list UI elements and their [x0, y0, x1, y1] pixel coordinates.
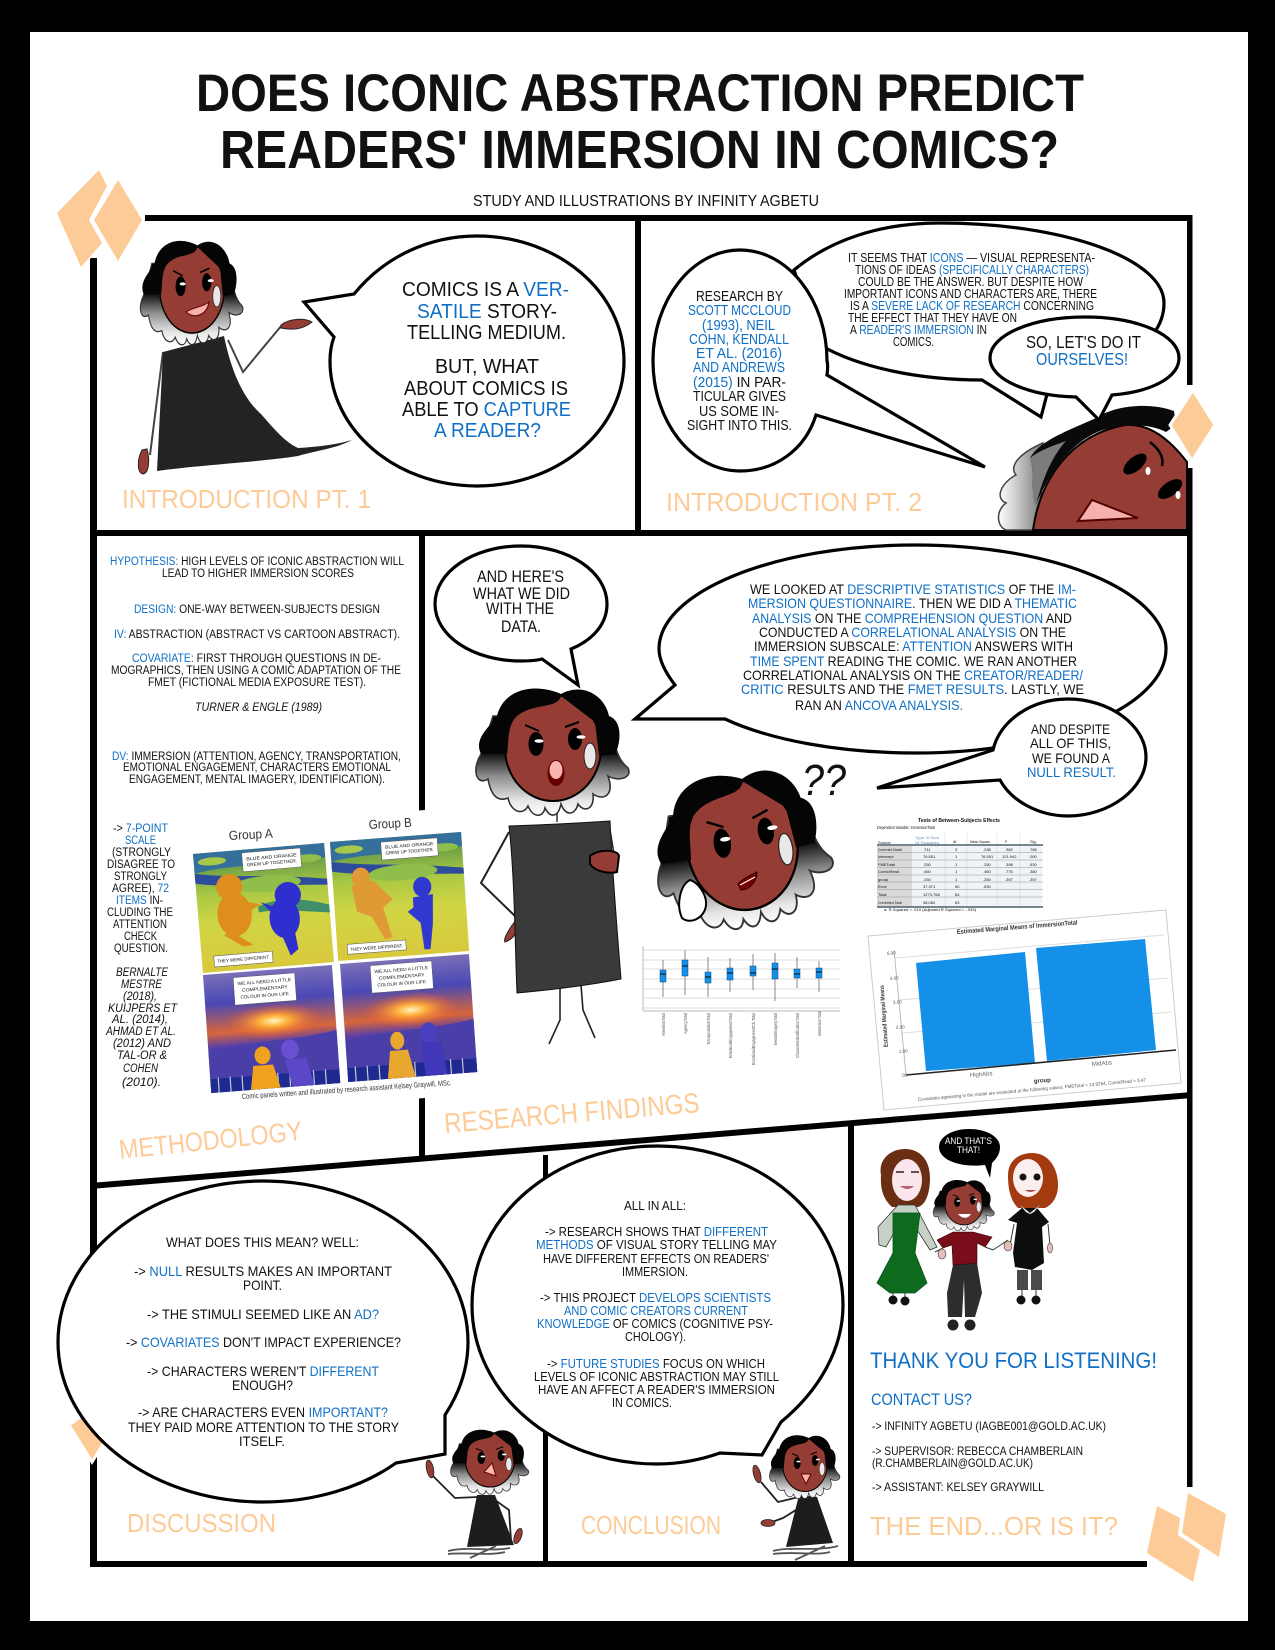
- decorative diamonds top-left: [57, 170, 142, 267]
- comic panel B top: BLUE AND ORANGE: [385, 841, 434, 850]
- panel: conclusion: [472, 1146, 843, 1560]
- speech bubble: versatile medium: BUT, WHAT: [435, 356, 539, 378]
- bar chart: estimated marginal means: 4.00: [890, 975, 899, 981]
- character: presenter pointing: [138, 241, 352, 474]
- speech bubble: versatile medium: ABOUT COMICS IS: [404, 378, 568, 400]
- ANOVA results table: .250: [983, 877, 992, 882]
- speech bubble: discussion points: -> CHARACTERS WEREN'T DIFFERENT: [147, 1363, 379, 1379]
- scale and references text: CHECK: [124, 931, 157, 943]
- speech bubble: discussion points: -> ARE CHARACTERS EVEN IMPORTANT?: [138, 1404, 388, 1420]
- ANOVA results table: df: [953, 839, 957, 844]
- bar chart: estimated marginal means: .00: [901, 1072, 908, 1078]
- black speech bubble: [939, 1129, 1000, 1178]
- speech bubble: icons explanation: COULD BE THE ANSWER. BUT DESPITE HOW: [858, 275, 1083, 289]
- panel: research findings: [435, 545, 1181, 1139]
- speech bubble: research by: [653, 250, 985, 471]
- panel label: methodology: METHODOLOGY: [117, 1116, 304, 1165]
- speech bubble: conclusions: [472, 1146, 843, 1464]
- title: [196, 64, 1084, 180]
- speech bubble: discussion points: -> THE STIMULI SEEMED LIKE AN AD?: [147, 1306, 379, 1322]
- bar chart: estimated marginal means: 5.00: [887, 950, 896, 956]
- figure caption: Comic panels written and illustrated by research assistant Kelsey Graywill, MSc.: [242, 1078, 452, 1101]
- speech bubble: analysis description: CONDUCTED A CORRELATIONAL ANALYSIS ON THE: [759, 624, 1066, 640]
- speech bubble: so let's do it ourselves: SO, LET'S DO IT: [1026, 332, 1141, 352]
- ANOVA results table: F: [1005, 839, 1008, 844]
- ANOVA results table: .460: [983, 869, 992, 874]
- speech bubble: icons explanation: A READER'S IMMERSION IN: [850, 323, 987, 337]
- ANOVA results table: Dependent Variable: ImmersionTotal: [877, 825, 935, 830]
- box plot of immersion subscales: [643, 946, 840, 1065]
- scale and references text: COHEN: [123, 1063, 159, 1075]
- speech bubble: versatile medium: SATILE STORY-: [417, 301, 557, 323]
- speech bubble: icons explanation: THE EFFECT THAT THEY HAVE ON: [848, 311, 1017, 325]
- study design text: LEAD TO HIGHER IMMERSION SCORES: [162, 568, 354, 580]
- bar chart: estimated marginal means: HighAbs: [970, 1071, 993, 1079]
- speech bubble: conclusions: ALL IN ALL:: [624, 1198, 686, 1213]
- speech bubble: conclusions: LEVELS OF ICONIC ABSTRACTION MAY STILL: [534, 1369, 779, 1384]
- scale and references text: MESTRE: [121, 979, 162, 991]
- comic panel B bottom: WE ALL NEED A LITTLE: [374, 965, 428, 974]
- bar chart: estimated marginal means: 2.00: [896, 1024, 905, 1030]
- scale and references text: AL. (2014),: [111, 1014, 168, 1026]
- speech bubble: so let's do it ourselves: OURSELVES!: [1036, 349, 1128, 369]
- speech bubble: research by: RESEARCH BY: [696, 288, 783, 305]
- icon: question marks: ??: [802, 756, 846, 805]
- speech bubble: research by: SIGHT INTO THIS.: [687, 417, 792, 434]
- speech bubble: research by: SCOTT MCCLOUD: [688, 302, 791, 319]
- ANOVA results table: 121.942: [1002, 854, 1017, 859]
- speech bubble: conclusions: METHODS OF VISUAL STORY TELLING MAY: [536, 1237, 777, 1252]
- decorative diamond lower left: [69, 1408, 115, 1462]
- ANOVA results table: .776: [1005, 869, 1014, 874]
- ANOVA results table: 1: [955, 862, 958, 867]
- speech bubble: conclusions: HAVE DIFFERENT EFFECTS ON READERS': [543, 1251, 769, 1266]
- ANOVA results table: .766: [1029, 847, 1038, 852]
- ANOVA results table: .250: [923, 877, 932, 882]
- box plot of immersion subscales: CharacterIdentificationTotal: [795, 1013, 800, 1058]
- speech bubble: and here's what we did: AND HERE'S: [477, 568, 564, 586]
- comic panel frame: [90, 215, 1192, 1567]
- speech bubble: null result: [877, 699, 1146, 816]
- speech bubble: conclusions: -> RESEARCH SHOWS THAT DIFFERENT: [545, 1224, 768, 1239]
- scale and references text: KUIJPERS ET: [108, 1003, 178, 1015]
- panel: introduction part 2: [653, 223, 1187, 530]
- ANOVA results table: Corrected Total: [878, 900, 902, 905]
- panel label: discussion: DISCUSSION: [127, 1508, 276, 1538]
- speech bubble: research by: AND ANDREWS: [693, 359, 785, 376]
- contact list: -> INFINITY AGBETU (IAGBE001@GOLD.AC.UK): [872, 1419, 1106, 1433]
- speech bubble: discussion points: ENOUGH?: [232, 1377, 293, 1393]
- study design text: FMET (FICTIONAL MEDIA EXPOSURE TEST).: [148, 677, 366, 689]
- speech bubble: conclusions: CHOLOGY).: [625, 1329, 686, 1344]
- ANOVA results table: .530: [1029, 862, 1038, 867]
- speech bubble: icons explanation: COMICS.: [893, 335, 934, 349]
- speech bubble: versatile medium: ABLE TO CAPTURE: [402, 399, 571, 421]
- illustration: three researchers: [877, 1129, 1058, 1330]
- ANOVA results table: .250: [983, 862, 992, 867]
- speech bubble: conclusions: HAVE AN AFFECT A READER'S IMMERSION: [538, 1382, 775, 1397]
- ANOVA results table: of Squares: [915, 840, 939, 845]
- panel: introduction part 1: [122, 236, 624, 514]
- speech bubble: conclusions: -> THIS PROJECT DEVELOPS SCIENTISTS: [540, 1290, 771, 1305]
- ANOVA results table: Total: [878, 892, 887, 897]
- speech bubble: null result: AND DESPITE: [1031, 721, 1110, 737]
- speech bubble: discussion points: WHAT DOES THIS MEAN? WELL:: [166, 1234, 359, 1250]
- speech bubble: null result: WE FOUND A: [1032, 750, 1111, 766]
- panel: the end: [870, 1129, 1157, 1541]
- comic panel A bottom: WE ALL NEED A LITTLE: [237, 977, 291, 986]
- scale and references text: QUESTION.: [114, 943, 168, 955]
- left researcher in green dress: [877, 1149, 937, 1306]
- study design text: [110, 556, 405, 786]
- bar chart: estimated marginal means: Estimated Marginal Means: [880, 984, 890, 1047]
- character: discussion presenter: [425, 1430, 529, 1558]
- speech bubble: icons explanation: IMPORTANT ICONS AND CHARACTERS ARE, THERE: [844, 287, 1097, 301]
- ANOVA results table: 1: [955, 854, 958, 859]
- ANOVA results table: ComicRead: [878, 869, 899, 874]
- speech bubble: analysis description: TIME SPENT READING THE COMIC. WE RAN ANOTHER: [750, 653, 1077, 669]
- title: DOES ICONIC ABSTRACTION PREDICT: [196, 64, 1084, 123]
- scale and references text: STRONGLY: [114, 871, 167, 883]
- contact list: [872, 1419, 1106, 1494]
- speech bubble: discussion points: POINT.: [243, 1277, 282, 1293]
- scale and references text: AHMAD ET AL.: [105, 1026, 176, 1038]
- speech bubble: icons explanation: IS A SEVERE LACK OF RESEARCH CONCERNING: [850, 299, 1094, 313]
- character: confused face: [644, 761, 840, 939]
- ANOVA results table: Corrected Model: [878, 847, 902, 852]
- speech bubble: analysis description: IMMERSION SUBSCALE: ATTENTION ANSWERS WITH: [754, 638, 1073, 654]
- ANOVA results table: 76.551: [981, 854, 994, 859]
- speech bubble: analysis description: WE LOOKED AT DESCRIPTIVE STATISTICS OF THE IM-: [750, 581, 1076, 597]
- ANOVA results table: 76.551: [923, 854, 936, 859]
- ANOVA results table: 63: [955, 900, 960, 905]
- ANOVA results table: Mean Square: [970, 839, 991, 844]
- speech bubble: icons explanation: IT SEEMS THAT ICONS — VISUAL REPRESENTA-: [848, 251, 1095, 265]
- comic panel A top: THEY WERE DIFFERENT.: [217, 954, 270, 964]
- study design text: MOGRAPHICS, THEN USING A COMIC ADAPTATION OF THE: [111, 665, 401, 677]
- scale and references text: BERNALTE: [116, 967, 168, 979]
- comic panel A top: BLUE AND ORANGE: [246, 852, 297, 861]
- speech bubble: discussion points: -> COVARIATES DON'T IMPACT EXPERIENCE?: [126, 1334, 401, 1350]
- comic panel B top: [330, 832, 469, 961]
- decorative diamonds bottom-right: [1147, 1493, 1226, 1582]
- speech bubble: icons explanation: [794, 223, 1164, 417]
- ANOVA results table: 60: [955, 884, 960, 889]
- stimuli figure: comic panels group A and B: Group B: [368, 815, 412, 832]
- scale and references text: ITEMS IN-: [116, 895, 163, 907]
- comic panel B top: THEY WERE DIFFERENT.: [350, 943, 403, 952]
- ANOVA results table: 1: [955, 877, 958, 882]
- ANOVA results table: .711: [923, 847, 931, 852]
- ANOVA results table: 3: [955, 847, 958, 852]
- bar chart: estimated marginal means: [868, 910, 1181, 1110]
- title: READERS' IMMERSION IN COMICS?: [220, 120, 1059, 180]
- speech bubble: analysis description: MERSION QUESTIONNAIRE. THEN WE DID A THEMATIC: [748, 595, 1077, 611]
- character: large face close-up: [998, 406, 1187, 530]
- ANOVA results table: Source: [878, 840, 891, 845]
- scale and references text: SCALE: [125, 835, 156, 847]
- panel: methodology: [105, 556, 502, 1165]
- ANOVA results table: .382: [1005, 847, 1014, 852]
- speech bubble: and here's what we did: WHAT WE DID: [473, 585, 570, 603]
- speech bubble: analysis description: ANALYSIS ON THE COMPREHENSION QUESTION AND: [752, 610, 1072, 626]
- comic panel B bottom: COLOUR IN OUR LIFE.: [377, 979, 427, 988]
- box plot of immersion subscales: EmotionalEngagementCh.Total: [751, 1013, 756, 1065]
- ANOVA results table: .630: [983, 884, 992, 889]
- comic panel B bottom: COMPLEMENTARY: [379, 972, 425, 981]
- ANOVA results table: .238: [983, 847, 992, 852]
- speech bubble: analysis description: RAN AN ANCOVA ANALYSIS.: [795, 697, 963, 713]
- speech bubble: analysis description: [635, 545, 1166, 753]
- thank you heading: THANK YOU FOR LISTENING!: [870, 1348, 1157, 1373]
- panel label: conclusion: CONCLUSION: [581, 1510, 721, 1540]
- box plot of immersion subscales: AttentionTotal: [661, 1013, 666, 1036]
- bar chart: estimated marginal means: 1.00: [899, 1048, 908, 1054]
- ANOVA results table: 38.082: [923, 900, 936, 905]
- ANOVA results table: .397: [1029, 877, 1038, 882]
- scale and references text: TAL-OR &: [117, 1050, 167, 1062]
- comic panel A bottom: [203, 965, 340, 1093]
- ANOVA results table: 1273.768: [923, 892, 940, 897]
- speech bubble: analysis description: CRITIC RESULTS AND THE FMET RESULTS. LASTLY, WE: [741, 681, 1084, 697]
- speech bubble: versatile medium: [304, 236, 624, 486]
- ANOVA results table: 64: [955, 892, 960, 897]
- ANOVA results table: Tests of Between-Subjects Effects: [918, 818, 1000, 824]
- panel label: introduction pt. 2: INTRODUCTION PT. 2: [666, 487, 922, 517]
- stimuli figure: comic panels group A and B: Group A: [228, 826, 273, 843]
- speech bubble: versatile medium: COMICS IS A VER-: [402, 279, 569, 301]
- ANOVA results table: .398: [1005, 862, 1014, 867]
- speech bubble: conclusions: IMMERSION.: [622, 1264, 688, 1279]
- speech bubble: versatile medium: TELLING MEDIUM.: [407, 322, 566, 344]
- speech bubble: research by: (2015) IN PAR-: [693, 374, 786, 391]
- panel: discussion: [58, 1181, 529, 1558]
- speech bubble: research by: TICULAR GIVES: [693, 388, 786, 405]
- contact list: -> ASSISTANT: KELSEY GRAYWILL: [872, 1480, 1044, 1494]
- panel label: introduction pt. 1: INTRODUCTION PT. 1: [122, 484, 371, 514]
- speech bubble: research by: ET AL. (2016): [696, 345, 782, 362]
- speech bubble: icons explanation: TIONS OF IDEAS (SPECIFICALLY CHARACTERS): [855, 263, 1089, 277]
- ANOVA results table: .250: [923, 862, 932, 867]
- scale and references text: (2018),: [123, 991, 157, 1003]
- ANOVA results table: Type III Sum: [915, 835, 940, 840]
- bar chart: estimated marginal means: 3.00: [893, 999, 902, 1005]
- study design text: IV: ABSTRACTION (ABSTRACT VS CARTOON ABSTRACT).: [114, 629, 400, 641]
- study design text: COVARIATE: FIRST THROUGH QUESTIONS IN DE-: [132, 653, 381, 665]
- speech bubble: conclusions: AND COMIC CREATORS CURRENT: [564, 1303, 748, 1318]
- scale and references text: DISAGREE TO: [107, 859, 175, 871]
- study design text: DV: IMMERSION (ATTENTION, AGENCY, TRANSPORTATION,: [112, 751, 401, 763]
- speech bubble: research by: (1993), NEIL: [702, 317, 775, 334]
- ANOVA results table: [877, 818, 1043, 912]
- speech bubble: discussion points: [58, 1181, 468, 1502]
- stimuli figure: comic panels group A and B: [186, 805, 502, 1114]
- bar chart: estimated marginal means: Covariates appearing in the model are evaluated at the following values: FMETotal = 14.9264, ComicRead = 3.47: [918, 1077, 1147, 1103]
- panel label: the end: THE END...OR IS IT?: [870, 1511, 1118, 1541]
- ANOVA results table: Sig.: [1030, 839, 1037, 844]
- box plot of immersion subscales: TransportationTotal: [706, 1013, 711, 1045]
- centre researcher in maroon top: [933, 1180, 1012, 1330]
- box plot of immersion subscales: ImmersionTotal: [817, 1011, 822, 1036]
- speech bubble: null result: ALL OF THIS,: [1030, 735, 1111, 751]
- ANOVA results table: Error: [878, 884, 888, 889]
- bar chart: estimated marginal means: Estimated Marginal Means of ImmersionTotal: [957, 920, 1078, 936]
- speech bubble: analysis description: CORRELATIONAL ANALYSIS ON THE CREATOR/READER/: [743, 667, 1083, 683]
- speech bubble: and here's what we did: WITH THE: [486, 600, 554, 618]
- ANOVA results table: 1: [955, 869, 958, 874]
- ANOVA results table: .460: [923, 869, 932, 874]
- right researcher in black dress: [1008, 1153, 1058, 1304]
- speech bubble: conclusions: -> FUTURE STUDIES FOCUS ON WHICH: [547, 1356, 765, 1371]
- scale and references text: ATTENTION: [113, 919, 167, 931]
- speech bubble: research by: COHN, KENDALL: [689, 331, 789, 348]
- study design text: TURNER & ENGLE (1989): [195, 702, 322, 714]
- ANOVA results table: .397: [1005, 877, 1014, 882]
- ANOVA results table: .380: [1029, 869, 1038, 874]
- box plot of immersion subscales: AgencyTotal: [683, 1013, 688, 1034]
- scale and references text: (2012) AND: [113, 1038, 171, 1050]
- speech bubble: versatile medium: A READER?: [434, 420, 541, 442]
- speech bubble: null result: NULL RESULT.: [1027, 764, 1116, 780]
- study design text: DESIGN: ONE-WAY BETWEEN-SUBJECTS DESIGN: [134, 604, 380, 616]
- black speech bubble: AND THAT'S: [945, 1136, 992, 1147]
- speech bubble: and here's what we did: [435, 546, 607, 685]
- bar chart: estimated marginal means: group: [1034, 1078, 1051, 1085]
- ANOVA results table: .000: [1029, 854, 1038, 859]
- ANOVA results table: 37.371: [923, 884, 936, 889]
- speech bubble: so let's do it ourselves: [990, 317, 1179, 420]
- scale and references text: CLUDING THE: [107, 907, 173, 919]
- scale and references text: [105, 823, 178, 1089]
- study design text: ENGAGEMENT, MENTAL IMAGERY, IDENTIFICATION).: [129, 774, 385, 786]
- box plot of immersion subscales: MentalImageryTotal: [773, 1013, 778, 1045]
- contact heading: CONTACT US?: [871, 1390, 972, 1409]
- black speech bubble: THAT!: [957, 1145, 980, 1156]
- contact list: -> SUPERVISOR: REBECCA CHAMBERLAIN: [872, 1444, 1083, 1458]
- comic panel A top: [193, 843, 334, 973]
- box plot of immersion subscales: EmotionalEngagementTotal: [728, 1013, 733, 1058]
- bar chart: estimated marginal means: MidAbs: [1092, 1060, 1112, 1068]
- comic panel A bottom: COMPLEMENTARY: [242, 984, 288, 993]
- speech bubble: discussion points: -> NULL RESULTS MAKES AN IMPORTANT: [134, 1263, 392, 1279]
- decorative diamond right: [1170, 390, 1215, 461]
- scale and references text: (2010).: [122, 1077, 161, 1089]
- scale and references text: -> 7-POINT: [113, 823, 168, 835]
- speech bubble: and here's what we did: DATA.: [501, 618, 541, 636]
- author line: STUDY AND ILLUSTRATIONS BY INFINITY AGBETU: [473, 193, 819, 210]
- character: standing presenter: [476, 689, 629, 1044]
- speech bubble: conclusions: IN COMICS.: [612, 1395, 672, 1410]
- ANOVA results table: a. R Squared = .019 (Adjusted R Squared = -.033): [884, 908, 977, 912]
- speech bubble: conclusions: KNOWLEDGE OF COMICS (COGNITIVE PSY-: [537, 1316, 773, 1331]
- contact list: (R.CHAMBERLAIN@GOLD.AC.UK): [872, 1456, 1033, 1470]
- ANOVA results table: group: [878, 877, 889, 882]
- scale and references text: (STRONGLY: [112, 847, 171, 859]
- panel label: research findings: RESEARCH FINDINGS: [443, 1087, 701, 1139]
- scale and references text: AGREE), 72: [112, 883, 169, 895]
- speech bubble: research by: US SOME IN-: [699, 403, 779, 420]
- comic panel B top: GREW UP TOGETHER.: [385, 847, 434, 856]
- character: conclusion presenter: [751, 1435, 840, 1560]
- ANOVA results table: FMETotal: [878, 862, 895, 867]
- study design text: HYPOTHESIS: HIGH LEVELS OF ICONIC ABSTRACTION WILL: [110, 556, 405, 568]
- comic panel B bottom: [340, 954, 477, 1082]
- comic panel A bottom: COLOUR IN OUR LIFE.: [240, 991, 290, 1000]
- comic panel A top: GREW UP TOGETHER.: [246, 858, 297, 867]
- speech bubble: discussion points: ITSELF.: [239, 1433, 285, 1449]
- speech bubble: discussion points: THEY PAID MORE ATTENTION TO THE STORY: [128, 1419, 400, 1435]
- ANOVA results table: Intercept: [878, 854, 894, 859]
- study design text: EMOTIONAL ENGAGEMENT, CHARACTERS EMOTIONAL: [123, 762, 392, 774]
